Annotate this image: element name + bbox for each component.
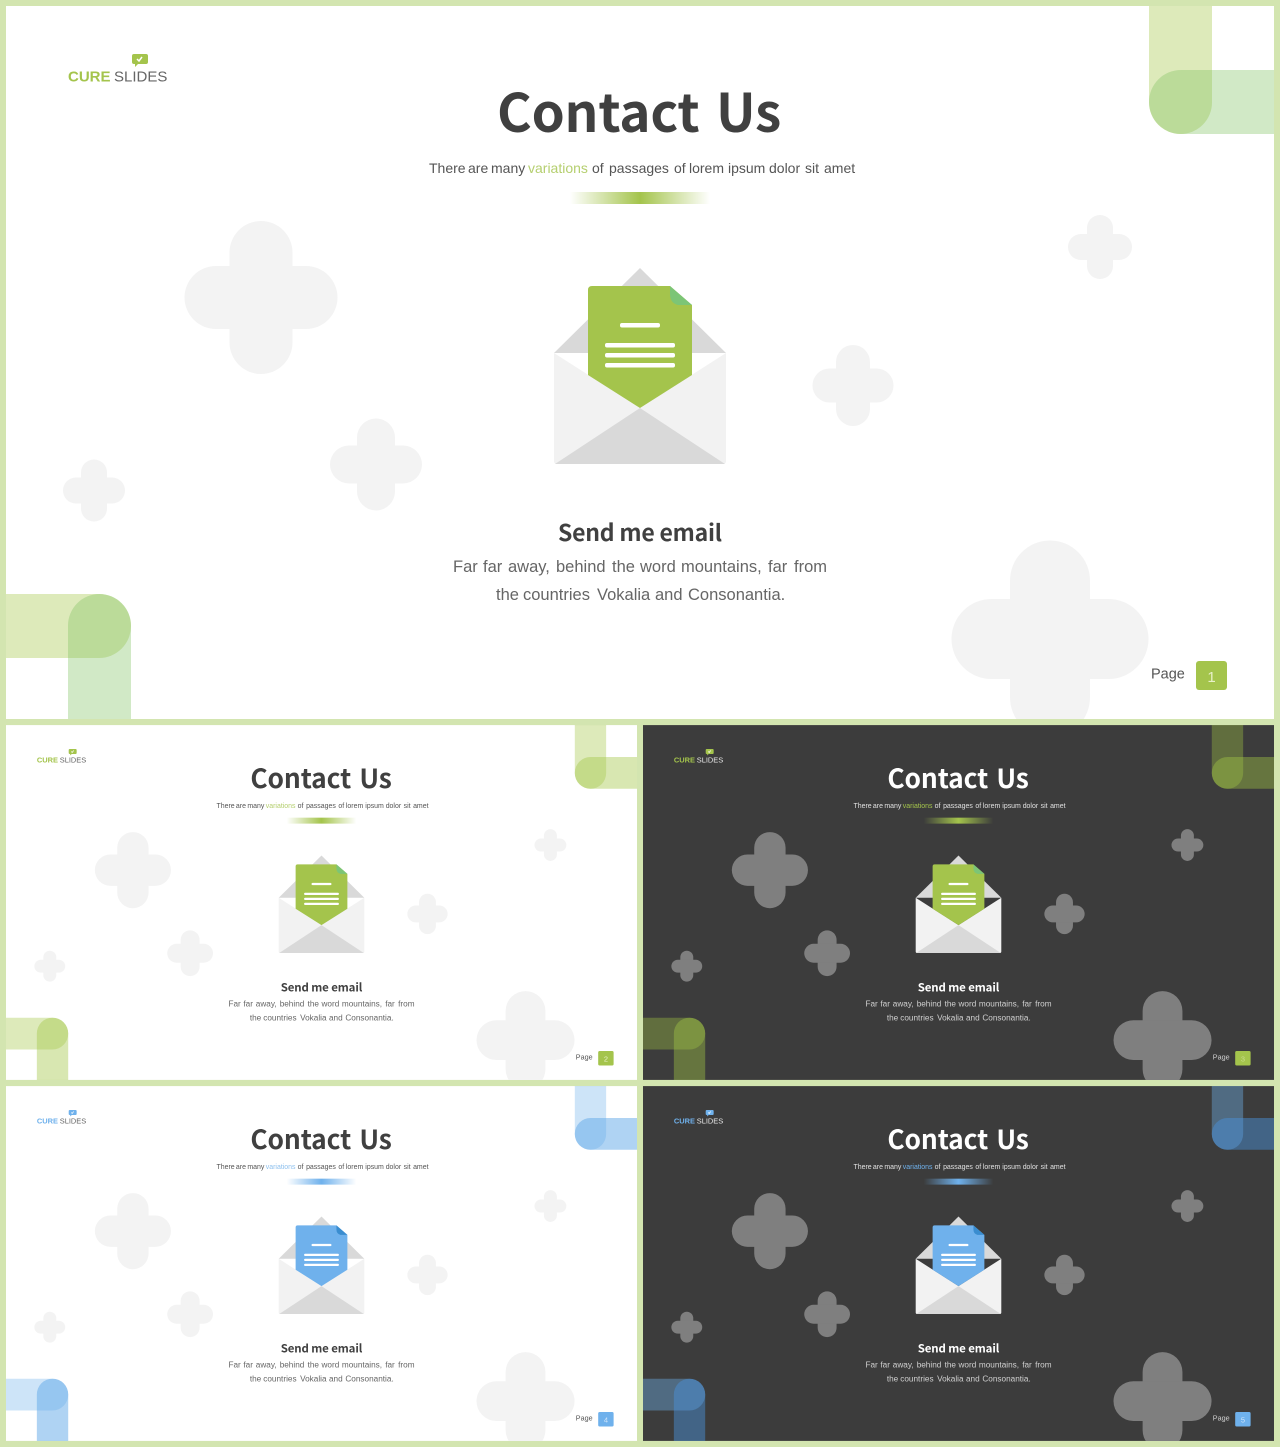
body text: mountains, bbox=[979, 1361, 1019, 1370]
title: Contact bbox=[250, 757, 351, 796]
icon: open envelope with document bbox=[916, 855, 1001, 953]
panel: slide 4, blue on white bbox=[6, 1086, 637, 1441]
body text: Vokalia bbox=[937, 1375, 964, 1384]
page number: Page bbox=[1213, 1053, 1230, 1062]
subtitle: variations bbox=[528, 160, 588, 176]
page number: 3 bbox=[1241, 1054, 1245, 1063]
page number bbox=[1213, 1051, 1251, 1065]
body text: far bbox=[483, 558, 503, 576]
subtitle: many bbox=[491, 160, 525, 176]
heading: send me email: Send me email bbox=[281, 1340, 363, 1356]
heading: send me email: Send me email bbox=[918, 1340, 1000, 1356]
body text: mountains, bbox=[342, 1000, 382, 1009]
body text: the bbox=[612, 558, 635, 576]
body text: word bbox=[957, 1000, 977, 1009]
subtitle: variations bbox=[903, 1164, 933, 1171]
logo: SLIDES bbox=[697, 756, 723, 765]
gradient divider bbox=[570, 192, 710, 204]
subtitle: variations bbox=[266, 803, 296, 810]
body text: mountains, bbox=[342, 1361, 382, 1370]
body text: from bbox=[794, 558, 827, 576]
body text: Consonantia. bbox=[982, 1375, 1031, 1384]
panel: slide 2, green on white bbox=[6, 725, 637, 1080]
panel: slide 5, blue on dark bbox=[643, 1086, 1274, 1441]
subtitle: of bbox=[674, 160, 686, 176]
subtitle: sit bbox=[805, 160, 819, 176]
body text: countries bbox=[263, 1014, 297, 1023]
body text: far bbox=[1022, 1361, 1032, 1370]
body text: countries bbox=[900, 1375, 934, 1384]
subtitle: ipsum bbox=[1002, 803, 1021, 810]
body text: far bbox=[385, 1000, 395, 1009]
body text: far bbox=[1022, 1000, 1032, 1009]
body text: countries bbox=[263, 1375, 297, 1384]
logo bbox=[37, 1110, 86, 1126]
subtitle: many bbox=[884, 1164, 902, 1171]
subtitle: There bbox=[429, 160, 466, 176]
subtitle: dolor bbox=[769, 160, 800, 176]
heading: send me email: Send me email bbox=[558, 514, 722, 548]
page number: Page bbox=[576, 1414, 593, 1423]
page number: Page bbox=[1151, 666, 1185, 682]
subtitle: sit bbox=[1041, 1164, 1048, 1171]
body text: the bbox=[887, 1375, 899, 1384]
page number bbox=[1151, 661, 1227, 690]
decorative cross shapes bbox=[34, 829, 575, 1089]
subtitle: are bbox=[236, 803, 246, 810]
body text: and bbox=[329, 1375, 343, 1384]
body text: Vokalia bbox=[300, 1375, 327, 1384]
top right corner ribbon bbox=[1149, 0, 1280, 134]
body text: far bbox=[385, 1361, 395, 1370]
body text: mountains, bbox=[681, 558, 762, 576]
title: Us bbox=[359, 757, 392, 796]
subtitle: of bbox=[935, 1164, 940, 1171]
subtitle: passages bbox=[943, 1164, 973, 1171]
subtitle: of bbox=[935, 803, 940, 810]
body text: from bbox=[1035, 1361, 1052, 1370]
subtitle: ipsum bbox=[365, 1164, 384, 1171]
logo bbox=[674, 1110, 723, 1126]
body text: word bbox=[639, 558, 676, 576]
icon: open envelope with document bbox=[916, 1216, 1001, 1314]
title: Us bbox=[716, 72, 781, 148]
body text: Vokalia bbox=[937, 1014, 964, 1023]
subtitle: of bbox=[975, 803, 981, 810]
body text: Far bbox=[453, 558, 478, 576]
subtitle: There bbox=[853, 1164, 872, 1171]
body text: and bbox=[329, 1014, 343, 1023]
title: Contact bbox=[497, 72, 700, 148]
gradient divider bbox=[287, 818, 356, 824]
body text: and bbox=[966, 1014, 980, 1023]
logo bbox=[68, 54, 167, 86]
subtitle: There bbox=[853, 803, 872, 810]
decorative cross shapes bbox=[671, 1190, 1212, 1447]
body text bbox=[228, 1000, 415, 1023]
subtitle: amet bbox=[824, 160, 855, 176]
subtitle: passages bbox=[306, 1164, 336, 1171]
subtitle: dolor bbox=[1023, 803, 1039, 810]
subtitle: variations bbox=[266, 1164, 296, 1171]
subtitle: sit bbox=[1041, 803, 1048, 810]
subtitle: dolor bbox=[386, 1164, 402, 1171]
subtitle: amet bbox=[1050, 1164, 1066, 1171]
subtitle: are bbox=[873, 803, 883, 810]
title: Contact bbox=[250, 1118, 351, 1157]
body text: Consonantia. bbox=[982, 1014, 1031, 1023]
subtitle: sit bbox=[404, 1164, 411, 1171]
subtitle: many bbox=[884, 803, 902, 810]
body text: Consonantia. bbox=[345, 1014, 394, 1023]
body text: far bbox=[243, 1361, 253, 1370]
body text: and bbox=[655, 586, 683, 604]
subtitle: many bbox=[247, 1164, 265, 1171]
body text: the bbox=[945, 1361, 956, 1370]
subtitle: of bbox=[338, 803, 344, 810]
body text: countries bbox=[523, 586, 590, 604]
page number: 4 bbox=[604, 1415, 608, 1424]
logo: SLIDES bbox=[60, 1117, 86, 1126]
body text bbox=[865, 1000, 1052, 1023]
body text: Far bbox=[865, 1000, 878, 1009]
body text: mountains, bbox=[979, 1000, 1019, 1009]
body text: behind bbox=[917, 1000, 942, 1009]
subtitle: dolor bbox=[1023, 1164, 1039, 1171]
subtitle: variations bbox=[903, 803, 933, 810]
body text bbox=[453, 558, 827, 604]
subtitle: There bbox=[216, 1164, 235, 1171]
heading: send me email: Send me email bbox=[281, 979, 363, 995]
logo: CURE bbox=[674, 756, 695, 765]
body text: far bbox=[768, 558, 788, 576]
icon: open envelope with document bbox=[279, 855, 364, 953]
subtitle: lorem bbox=[346, 803, 363, 810]
body text: Far bbox=[228, 1361, 241, 1370]
bottom left corner ribbon bbox=[0, 1379, 68, 1447]
gradient divider bbox=[924, 1179, 993, 1185]
body text: the bbox=[887, 1014, 899, 1023]
subtitle: ipsum bbox=[728, 160, 765, 176]
top right corner ribbon bbox=[1212, 1056, 1280, 1150]
subtitle: many bbox=[247, 803, 265, 810]
body text: Vokalia bbox=[300, 1014, 327, 1023]
bottom left corner ribbon bbox=[613, 1018, 705, 1112]
subtitle: lorem bbox=[983, 1164, 1000, 1171]
logo: SLIDES bbox=[60, 756, 86, 765]
logo: SLIDES bbox=[114, 68, 167, 86]
gradient divider bbox=[287, 1179, 356, 1185]
body text: the bbox=[308, 1000, 319, 1009]
body text: word bbox=[320, 1361, 340, 1370]
body text: countries bbox=[900, 1014, 934, 1023]
subtitle: of bbox=[298, 803, 303, 810]
icon: open envelope with document bbox=[554, 268, 726, 464]
logo: CURE bbox=[37, 1117, 58, 1126]
bottom left corner ribbon bbox=[0, 1018, 68, 1112]
logo: CURE bbox=[37, 756, 58, 765]
body text: the bbox=[945, 1000, 956, 1009]
subtitle: of bbox=[975, 1164, 981, 1171]
subtitle: passages bbox=[609, 160, 669, 176]
subtitle: lorem bbox=[689, 160, 724, 176]
subtitle: ipsum bbox=[1002, 1164, 1021, 1171]
subtitle: are bbox=[236, 1164, 246, 1171]
subtitle: are bbox=[468, 160, 488, 176]
page number bbox=[576, 1051, 614, 1065]
page number bbox=[1213, 1412, 1251, 1426]
logo bbox=[37, 749, 86, 765]
page number bbox=[576, 1412, 614, 1426]
panel: main slide, green on white bbox=[6, 6, 1274, 719]
panel: slide 3, green on dark bbox=[643, 725, 1274, 1080]
body text: Consonantia. bbox=[345, 1375, 394, 1384]
body text: Far bbox=[228, 1000, 241, 1009]
icon: open envelope with document bbox=[279, 1216, 364, 1314]
body text: far bbox=[243, 1000, 253, 1009]
bottom left corner ribbon bbox=[0, 594, 131, 784]
body text: word bbox=[320, 1000, 340, 1009]
subtitle: lorem bbox=[983, 803, 1000, 810]
page number: Page bbox=[576, 1053, 593, 1062]
body text: away, bbox=[893, 1361, 914, 1370]
body text: from bbox=[398, 1000, 415, 1009]
subtitle: passages bbox=[306, 803, 336, 810]
body text: the bbox=[250, 1375, 262, 1384]
title: Us bbox=[359, 1118, 392, 1157]
subtitle: are bbox=[873, 1164, 883, 1171]
subtitle: of bbox=[298, 1164, 303, 1171]
body text: behind bbox=[280, 1000, 305, 1009]
body text: Vokalia bbox=[597, 586, 651, 604]
title: Contact bbox=[887, 757, 988, 796]
body text: behind bbox=[280, 1361, 305, 1370]
body text: word bbox=[957, 1361, 977, 1370]
body text: Far bbox=[865, 1361, 878, 1370]
title: Contact bbox=[887, 1118, 988, 1157]
logo: SLIDES bbox=[697, 1117, 723, 1126]
body text: the bbox=[496, 586, 519, 604]
top right corner ribbon bbox=[575, 695, 669, 789]
subtitle: of bbox=[338, 1164, 344, 1171]
body text: far bbox=[880, 1000, 890, 1009]
subtitle: lorem bbox=[346, 1164, 363, 1171]
logo: CURE bbox=[674, 1117, 695, 1126]
subtitle: There bbox=[216, 803, 235, 810]
subtitle: of bbox=[592, 160, 604, 176]
body text bbox=[865, 1361, 1052, 1384]
body text: far bbox=[880, 1361, 890, 1370]
body text bbox=[228, 1361, 415, 1384]
body text: behind bbox=[917, 1361, 942, 1370]
gradient divider bbox=[924, 818, 993, 824]
top right corner ribbon bbox=[1212, 695, 1280, 789]
body text: the bbox=[308, 1361, 319, 1370]
body text: away, bbox=[508, 558, 550, 576]
heading: send me email: Send me email bbox=[918, 979, 1000, 995]
body text: and bbox=[966, 1375, 980, 1384]
body text: behind bbox=[556, 558, 606, 576]
top right corner ribbon bbox=[575, 1056, 669, 1150]
body text: the bbox=[250, 1014, 262, 1023]
subtitle: sit bbox=[404, 803, 411, 810]
bottom left corner ribbon bbox=[613, 1379, 705, 1447]
page number: 5 bbox=[1241, 1415, 1245, 1424]
decorative cross shapes bbox=[63, 215, 1148, 738]
body text: from bbox=[1035, 1000, 1052, 1009]
page number: Page bbox=[1213, 1414, 1230, 1423]
title: Us bbox=[996, 1118, 1029, 1157]
logo bbox=[674, 749, 723, 765]
subtitle: amet bbox=[413, 803, 429, 810]
subtitle: ipsum bbox=[365, 803, 384, 810]
decorative cross shapes bbox=[34, 1190, 575, 1447]
title: Us bbox=[996, 757, 1029, 796]
decorative cross shapes bbox=[671, 829, 1212, 1089]
logo: CURE bbox=[68, 68, 111, 86]
body text: away, bbox=[256, 1361, 277, 1370]
page number: 2 bbox=[604, 1054, 608, 1063]
subtitle: amet bbox=[413, 1164, 429, 1171]
body text: away, bbox=[256, 1000, 277, 1009]
body text: from bbox=[398, 1361, 415, 1370]
subtitle: passages bbox=[943, 803, 973, 810]
body text: Consonantia. bbox=[688, 586, 785, 604]
subtitle: amet bbox=[1050, 803, 1066, 810]
body text: away, bbox=[893, 1000, 914, 1009]
page number: 1 bbox=[1207, 669, 1216, 686]
subtitle: dolor bbox=[386, 803, 402, 810]
